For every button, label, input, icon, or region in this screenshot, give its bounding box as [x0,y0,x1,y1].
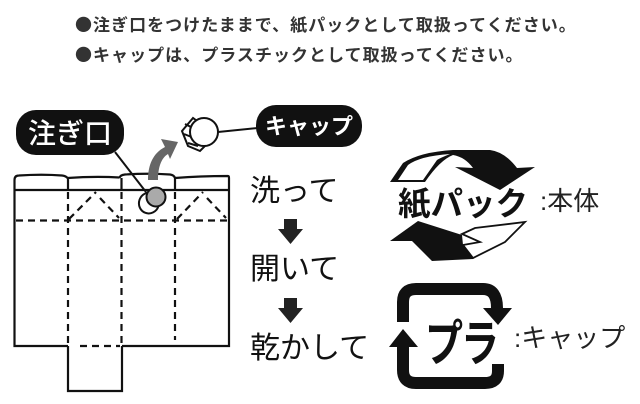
cap illustration [182,118,258,151]
label: spout: 注ぎ口 [28,112,112,152]
carton outline [14,174,229,391]
arrow: down 1 [278,219,303,244]
upper arrow [390,150,535,190]
heading notes [75,11,577,66]
carton diagram [14,174,229,391]
fold lines [16,192,228,346]
recycling arrows [403,289,497,322]
note: cap handling: ●キャップは、プラスチックとして取扱ってください。 [75,41,524,66]
steps [250,175,369,365]
legend: cap: :キャップ [514,323,625,353]
label: cap [256,105,362,147]
step: open: 開いて [250,253,339,286]
spout on carton [115,152,166,216]
label: cap: キャップ [265,114,353,139]
note: carton handling: ●注ぎ口をつけたままで、紙パックとして取扱ってください。 [75,11,577,36]
step: dry: 乾かして [250,332,369,365]
logo: plastic [389,289,512,383]
legend: carton body: :本体 [540,186,599,216]
step: wash: 洗って [250,175,338,208]
lower arrow [390,221,505,261]
arrow: down 2 [278,298,303,323]
logo text: 紙パック [398,186,528,222]
arrow: cap removal [148,139,178,180]
logo text: プラ [425,317,497,372]
logo: paper pack [390,150,535,261]
label: spout [16,110,124,155]
